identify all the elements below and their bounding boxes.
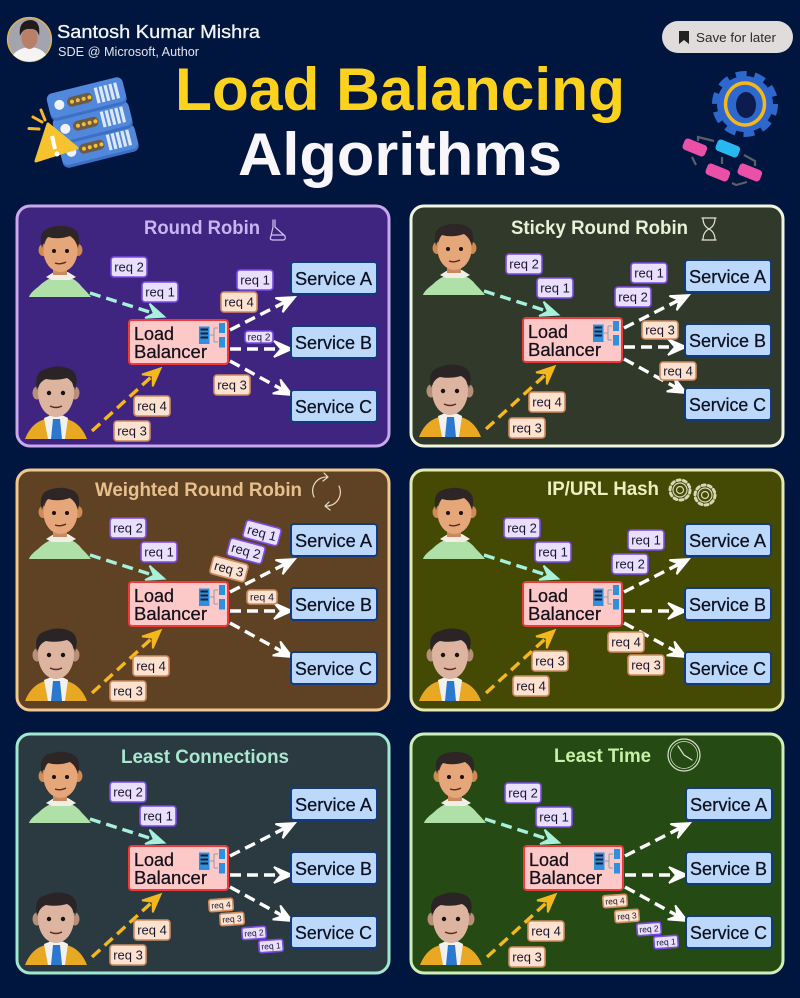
services: Service C [295, 659, 372, 679]
request labels: req 2 [508, 786, 538, 800]
services: Service B [295, 333, 372, 353]
client and arrows [25, 226, 299, 439]
services: Service A [689, 531, 766, 551]
heading: least time: Least Time [554, 746, 651, 767]
icon: flowchart [681, 137, 763, 185]
request labels: req 3 [217, 378, 247, 392]
request labels: req 2 [113, 520, 143, 536]
panel: weighted round robin [17, 470, 389, 710]
icon: clock [668, 739, 700, 771]
request labels: req 3 [617, 910, 637, 922]
request labels: req 2 [507, 520, 537, 536]
heading: sticky round robin: Sticky Round Robin [511, 218, 688, 239]
icon: hourglass [702, 218, 716, 240]
request labels: req 3 [645, 322, 675, 338]
request labels: req 4 [611, 634, 641, 650]
request labels: req 1 [143, 808, 173, 824]
request labels: req 4 [137, 398, 167, 414]
request labels: req 4 [516, 678, 546, 694]
request labels: req 3 [222, 913, 242, 925]
request labels: req 2 [230, 540, 262, 562]
request labels: req 3 [213, 558, 245, 580]
heading: round robin: Round Robin [144, 218, 260, 239]
request labels: req 4 [250, 592, 274, 604]
icon: gears [670, 480, 715, 505]
request labels: req 2 [639, 923, 659, 935]
services [291, 262, 377, 422]
icon: gear [716, 75, 774, 133]
client and arrows [25, 752, 299, 965]
request labels: req 4 [531, 924, 561, 938]
request labels: req 3 [512, 950, 542, 964]
request labels: req 4 [605, 895, 625, 907]
request labels: req 3 [535, 654, 565, 668]
heading: ip/url hash: IP/URL Hash [547, 479, 659, 500]
services [685, 260, 771, 420]
client and arrows [420, 752, 694, 965]
request labels: req 2 [248, 332, 271, 344]
request labels [506, 254, 696, 438]
request labels: req 2 [615, 556, 645, 572]
services: Service B [295, 595, 372, 615]
request labels [110, 518, 282, 701]
load balancer [524, 846, 623, 890]
request labels: req 1 [538, 544, 568, 560]
request labels [504, 518, 664, 696]
panel: round robin [17, 206, 389, 446]
services: Service A [295, 795, 372, 815]
request labels: req 1 [240, 272, 270, 288]
request labels: req 3 [512, 420, 542, 436]
services: Service B [295, 859, 372, 879]
load balancer: Load [528, 322, 568, 342]
author name: Santosh Kumar Mishra [57, 22, 261, 42]
services [686, 788, 772, 948]
request labels: req 1 [246, 522, 278, 544]
request labels [111, 257, 273, 441]
request labels: req 1 [634, 266, 664, 280]
author avatar [8, 18, 52, 62]
load balancer: Balancer [528, 604, 601, 624]
client and arrows [419, 488, 693, 701]
panel: least connections [17, 734, 389, 973]
save for later button: Save for later [696, 30, 777, 45]
request labels: req 1 [144, 544, 174, 560]
request labels: req 2 [509, 256, 539, 272]
request labels: req 3 [117, 424, 147, 438]
services: Service C [295, 397, 372, 417]
load balancer: Load [134, 850, 174, 870]
icon: cycle arrows [313, 473, 340, 510]
services [291, 524, 377, 684]
request labels: req 4 [532, 394, 562, 410]
request labels: req 3 [113, 948, 143, 962]
services: Service C [689, 659, 766, 679]
request labels: req 3 [631, 658, 661, 672]
services: Service B [690, 859, 767, 879]
request labels: req 1 [261, 940, 281, 952]
icon: server stack with warning [29, 76, 140, 169]
panel: sticky round robin [411, 206, 783, 446]
load balancer: Load [528, 586, 568, 606]
load balancer [129, 582, 228, 626]
request labels: req 1 [145, 284, 175, 300]
request labels: req 4 [224, 294, 254, 310]
request labels: req 4 [137, 922, 167, 938]
request labels: req 3 [113, 684, 143, 698]
load balancer: Balancer [528, 340, 601, 360]
request labels: req 2 [244, 927, 264, 939]
services [291, 788, 377, 948]
services: Service B [689, 595, 766, 615]
load balancer [129, 320, 228, 364]
services: Service C [690, 923, 767, 943]
request labels: req 2 [113, 784, 143, 800]
request labels: req 4 [136, 658, 166, 674]
heading: least connections: Least Connections [121, 747, 289, 768]
load balancer: Load [134, 586, 174, 606]
client and arrows [25, 488, 299, 701]
load balancer: Load [134, 324, 174, 344]
load balancer [129, 846, 228, 890]
request labels: req 4 [211, 899, 231, 911]
services: Service C [295, 923, 372, 943]
load balancer: Balancer [134, 868, 207, 888]
request labels: req 1 [656, 936, 676, 948]
request labels: req 4 [663, 364, 693, 378]
load balancer: Load [529, 850, 569, 870]
request labels: req 1 [631, 532, 661, 548]
request labels: req 1 [539, 810, 569, 824]
save for later button [662, 21, 793, 53]
services [685, 524, 771, 684]
services: Service A [295, 531, 372, 551]
services: Service B [689, 331, 766, 351]
request labels [110, 782, 283, 965]
services: Service A [689, 267, 766, 287]
load balancer [523, 318, 622, 362]
title: Algorithms [238, 121, 562, 188]
panel: ip/url hash [411, 470, 783, 710]
load balancer [523, 582, 622, 626]
load balancer: Balancer [134, 342, 207, 362]
request labels: req 2 [114, 260, 144, 274]
request labels: req 1 [540, 280, 570, 296]
request labels [505, 783, 678, 967]
panel: least time [411, 734, 783, 973]
client and arrows [419, 224, 693, 437]
request labels: req 2 [618, 290, 648, 304]
title [175, 56, 625, 188]
load balancer: Balancer [529, 868, 602, 888]
services: Service C [689, 395, 766, 415]
load balancer: Balancer [134, 604, 207, 624]
icon: flask [270, 220, 285, 240]
services: Service A [295, 269, 372, 289]
author role: SDE @ Microsoft, Author [58, 45, 199, 59]
services: Service A [690, 795, 767, 815]
title: Load Balancing [175, 56, 625, 123]
heading: weighted round robin: Weighted Round Robin [95, 480, 302, 501]
